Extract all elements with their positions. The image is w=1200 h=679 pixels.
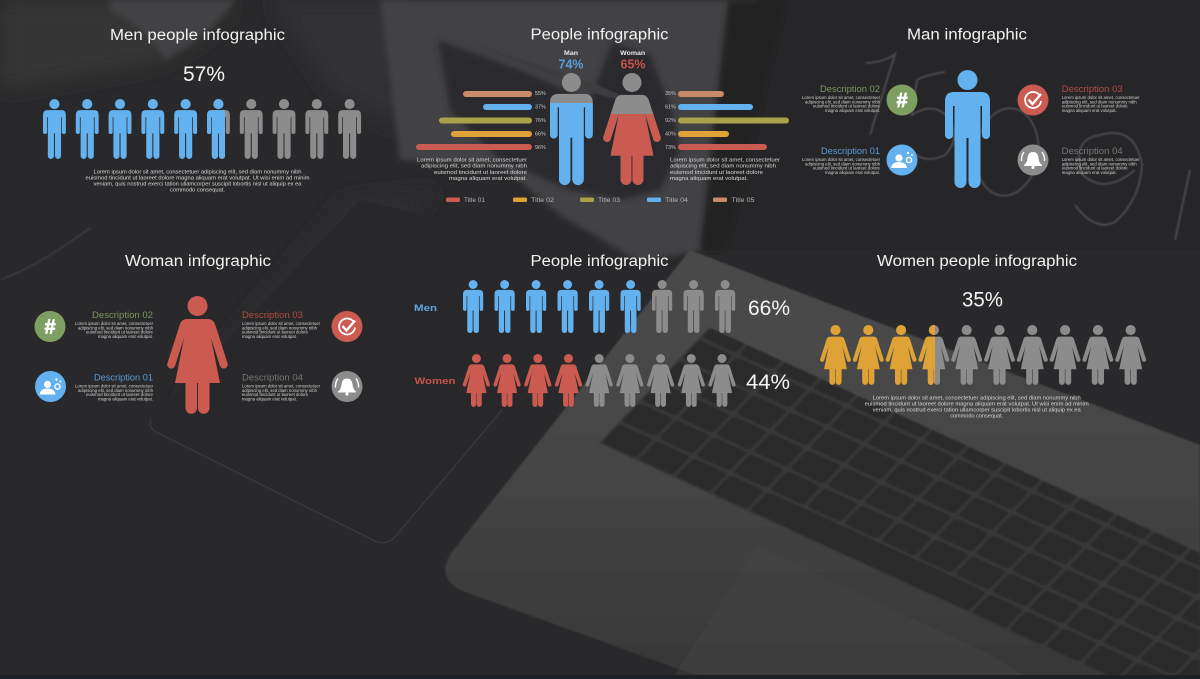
- woman figure: [167, 296, 228, 414]
- description 04: [1062, 146, 1140, 175]
- description 04: Lorem ipsum dolor sit amet, consectetuer: [1062, 157, 1140, 162]
- description 01: Lorem ipsum dolor sit amet, consectetuer: [75, 384, 153, 388]
- body text: Lorem ipsum dolor sit amet, consectetuer adipiscing elit, sed diam nonummy nibh: [873, 396, 1081, 402]
- men label: Men: [414, 303, 437, 314]
- title: Woman infographic: [125, 253, 271, 270]
- women percentage: 44%: [746, 371, 790, 394]
- right text block: Lorem ipsum dolor sit amet, consectetuer: [670, 158, 780, 164]
- icon: hash: #: [896, 90, 908, 112]
- men percentage: 66%: [748, 297, 790, 320]
- description 03: adipiscing elit, sed diam nonummy nibh: [1062, 99, 1137, 104]
- right bar chart: 73%: [665, 145, 676, 151]
- panel: man infographic: [802, 26, 1140, 188]
- icon: check: [332, 311, 362, 342]
- description 03: adipiscing elit, sed diam nonummy nibh: [242, 325, 317, 330]
- description 01: magna aliquam erat volutpat.: [98, 396, 153, 402]
- tablet: [150, 200, 620, 543]
- description 01: euismod tincidunt ut laoreet dolore: [813, 166, 880, 171]
- left text block: adipiscing elit, sed diam nonummy nibh: [421, 164, 527, 170]
- man label and value: 74%: [558, 58, 584, 72]
- left bar chart: 76%: [535, 118, 546, 124]
- description 03: magna aliquam erat volutpat.: [1062, 108, 1117, 113]
- men pictogram row: [463, 280, 735, 333]
- title: People infographic: [530, 253, 669, 270]
- description 02: Description 02: [820, 84, 880, 95]
- right bar chart: [665, 91, 789, 151]
- description 02: adipiscing elit, sed diam nonummy nibh: [805, 99, 880, 104]
- body text: commodo consequat.: [170, 188, 225, 194]
- description 04: adipiscing elit, sed diam nonummy nibh: [242, 388, 317, 393]
- description 01: Lorem ipsum dolor sit amet, consectetuer: [802, 157, 880, 162]
- description 02: Lorem ipsum dolor sit amet, consectetuer: [75, 321, 153, 326]
- description 02: euismod tincidunt ut laoreet dolore: [86, 330, 153, 335]
- chalk digits: [866, 54, 1190, 240]
- icon: bell: [332, 371, 362, 402]
- description 01: adipiscing elit, sed diam nonummy nibh: [805, 161, 880, 166]
- legend: Title 04: [665, 197, 688, 204]
- body text: Lorem ipsum dolor sit amet, consectetuer adipiscing elit, sed diam nonummy nibh: [94, 170, 302, 176]
- left bar chart: 66%: [535, 132, 546, 138]
- body text: [86, 170, 310, 194]
- description 03: [1062, 84, 1140, 113]
- description 03: [242, 310, 320, 339]
- description 02: [802, 84, 880, 113]
- title: Man infographic: [907, 26, 1027, 44]
- legend: Title 01: [464, 197, 485, 204]
- description 02: [75, 310, 153, 339]
- left bar chart: 96%: [535, 145, 546, 151]
- description 03: magna aliquam erat volutpat.: [242, 334, 297, 339]
- panel: people infographic with two rows: [414, 253, 790, 407]
- description 03: Description 03: [1062, 84, 1123, 95]
- description 02: Description 02: [92, 310, 153, 321]
- man figure: [945, 70, 990, 188]
- left bar chart: 55%: [535, 91, 546, 97]
- description 02: magna aliquam erat volutpat.: [825, 108, 880, 113]
- body text: veniam, quis nostrud exerci tation ullamcorper suscipit lobortis nisl ut aliquip ex ea: [94, 182, 302, 188]
- description 04: Description 04: [1062, 146, 1123, 157]
- title: People infographic: [530, 26, 669, 44]
- pictogram row: women: [820, 325, 1146, 385]
- description 04: euismod tincidunt ut laoreet dolore: [242, 392, 308, 397]
- description 02: adipiscing elit, sed diam nonummy nibh: [78, 325, 153, 330]
- description 03: euismod tincidunt ut laoreet dolore: [1062, 104, 1128, 109]
- description 04: Lorem ipsum dolor sit amet, consectetuer: [242, 384, 320, 388]
- laptop: [445, 250, 1200, 679]
- icon: person with gears: [886, 144, 918, 176]
- left text block: [417, 158, 527, 182]
- legend: Title 03: [598, 197, 620, 204]
- description 03: Lorem ipsum dolor sit amet, consectetuer: [242, 321, 320, 326]
- right bar chart: 61%: [665, 104, 676, 110]
- description 04: euismod tincidunt ut laoreet dolore: [1062, 166, 1128, 171]
- description 03: Description 03: [242, 310, 303, 321]
- description 02: magna aliquam erat volutpat.: [98, 334, 153, 339]
- woman label and value: Woman: [620, 50, 645, 57]
- description 01: [802, 146, 880, 175]
- woman label and value: 65%: [620, 58, 646, 72]
- description 02: Lorem ipsum dolor sit amet, consectetuer: [802, 95, 880, 100]
- man figure 74%: [550, 73, 593, 185]
- right text block: magna aliquam erat volutpat.: [670, 176, 748, 182]
- description 01: adipiscing elit, sed diam nonummy nibh: [78, 388, 153, 393]
- right bar chart: 35%: [665, 91, 676, 97]
- panel: woman infographic: [34, 253, 362, 414]
- description 04: adipiscing elit, sed diam nonummy nibh: [1062, 161, 1137, 166]
- title: Men people infographic: [110, 27, 285, 44]
- panel: men people infographic: [43, 27, 361, 194]
- description 03: euismod tincidunt ut laoreet dolore: [242, 330, 308, 335]
- body text: commodo consequat.: [950, 414, 1004, 420]
- percentage: 57%: [183, 63, 225, 86]
- description 01: Description 01: [94, 372, 153, 384]
- description 01: magna aliquam erat volutpat.: [825, 170, 880, 175]
- description 01: Description 01: [821, 146, 880, 157]
- man label and value: Man: [564, 50, 578, 57]
- women label: Women: [414, 376, 456, 387]
- women pictogram row: [463, 354, 736, 407]
- description 04: magna aliquam erat volutpat.: [242, 396, 297, 402]
- icon: hash: [34, 311, 66, 342]
- woman label and value: [620, 50, 646, 72]
- left text block: euismod tincidunt ut laoreet dolore: [434, 170, 527, 176]
- title: Women people infographic: [877, 253, 1077, 270]
- panel: people infographic with bars: [416, 26, 789, 204]
- woman figure 65%: [603, 73, 661, 185]
- description 01: [75, 372, 153, 402]
- body text: veniam, quis nostrud exerci tation ullamcorper suscipit lobortis nisl ut aliquip ex ea: [873, 408, 1082, 414]
- description 04: Description 04: [242, 372, 303, 384]
- percentage: 35%: [962, 289, 1003, 312]
- body text: euismod tincidunt ut laoreet dolore magna aliquam erat volutpat. Ut wisi enim ad minim: [86, 176, 310, 182]
- left text block: magna aliquam erat volutpat.: [449, 176, 527, 182]
- legend: [446, 197, 755, 204]
- legend: Title 05: [732, 197, 755, 204]
- legend: Title 02: [531, 197, 554, 204]
- icon: bell: [1018, 144, 1048, 176]
- left bar chart: [416, 91, 546, 151]
- right text block: [670, 158, 780, 182]
- pictogram row: men: [43, 99, 361, 159]
- right bar chart: 92%: [665, 118, 676, 124]
- man label and value: [558, 50, 584, 72]
- icon: person with gears: [35, 371, 66, 402]
- right bar chart: 40%: [665, 132, 676, 138]
- right text block: adipiscing elit, sed diam nonummy nibh: [670, 164, 776, 170]
- icon: hash: #: [44, 316, 56, 338]
- description 04: [242, 372, 320, 402]
- panel: women people infographic: [820, 253, 1146, 420]
- body text: euismod tincidunt ut laoreet dolore magna aliquam erat volutpat. Ut wisi enim ad minim: [865, 402, 1089, 408]
- description 01: euismod tincidunt ut laoreet dolore: [86, 392, 153, 397]
- left bar chart: 37%: [535, 104, 546, 110]
- body text: [865, 396, 1089, 420]
- left text block: Lorem ipsum dolor sit amet, consectetuer: [417, 158, 527, 164]
- right text block: euismod tincidunt ut laoreet dolore: [670, 170, 763, 176]
- description 03: Lorem ipsum dolor sit amet, consectetuer: [1062, 95, 1140, 100]
- description 04: magna aliquam erat volutpat.: [1062, 170, 1117, 175]
- icon: hash: [886, 84, 918, 116]
- description 02: euismod tincidunt ut laoreet dolore: [813, 104, 880, 109]
- icon: check: [1018, 84, 1048, 116]
